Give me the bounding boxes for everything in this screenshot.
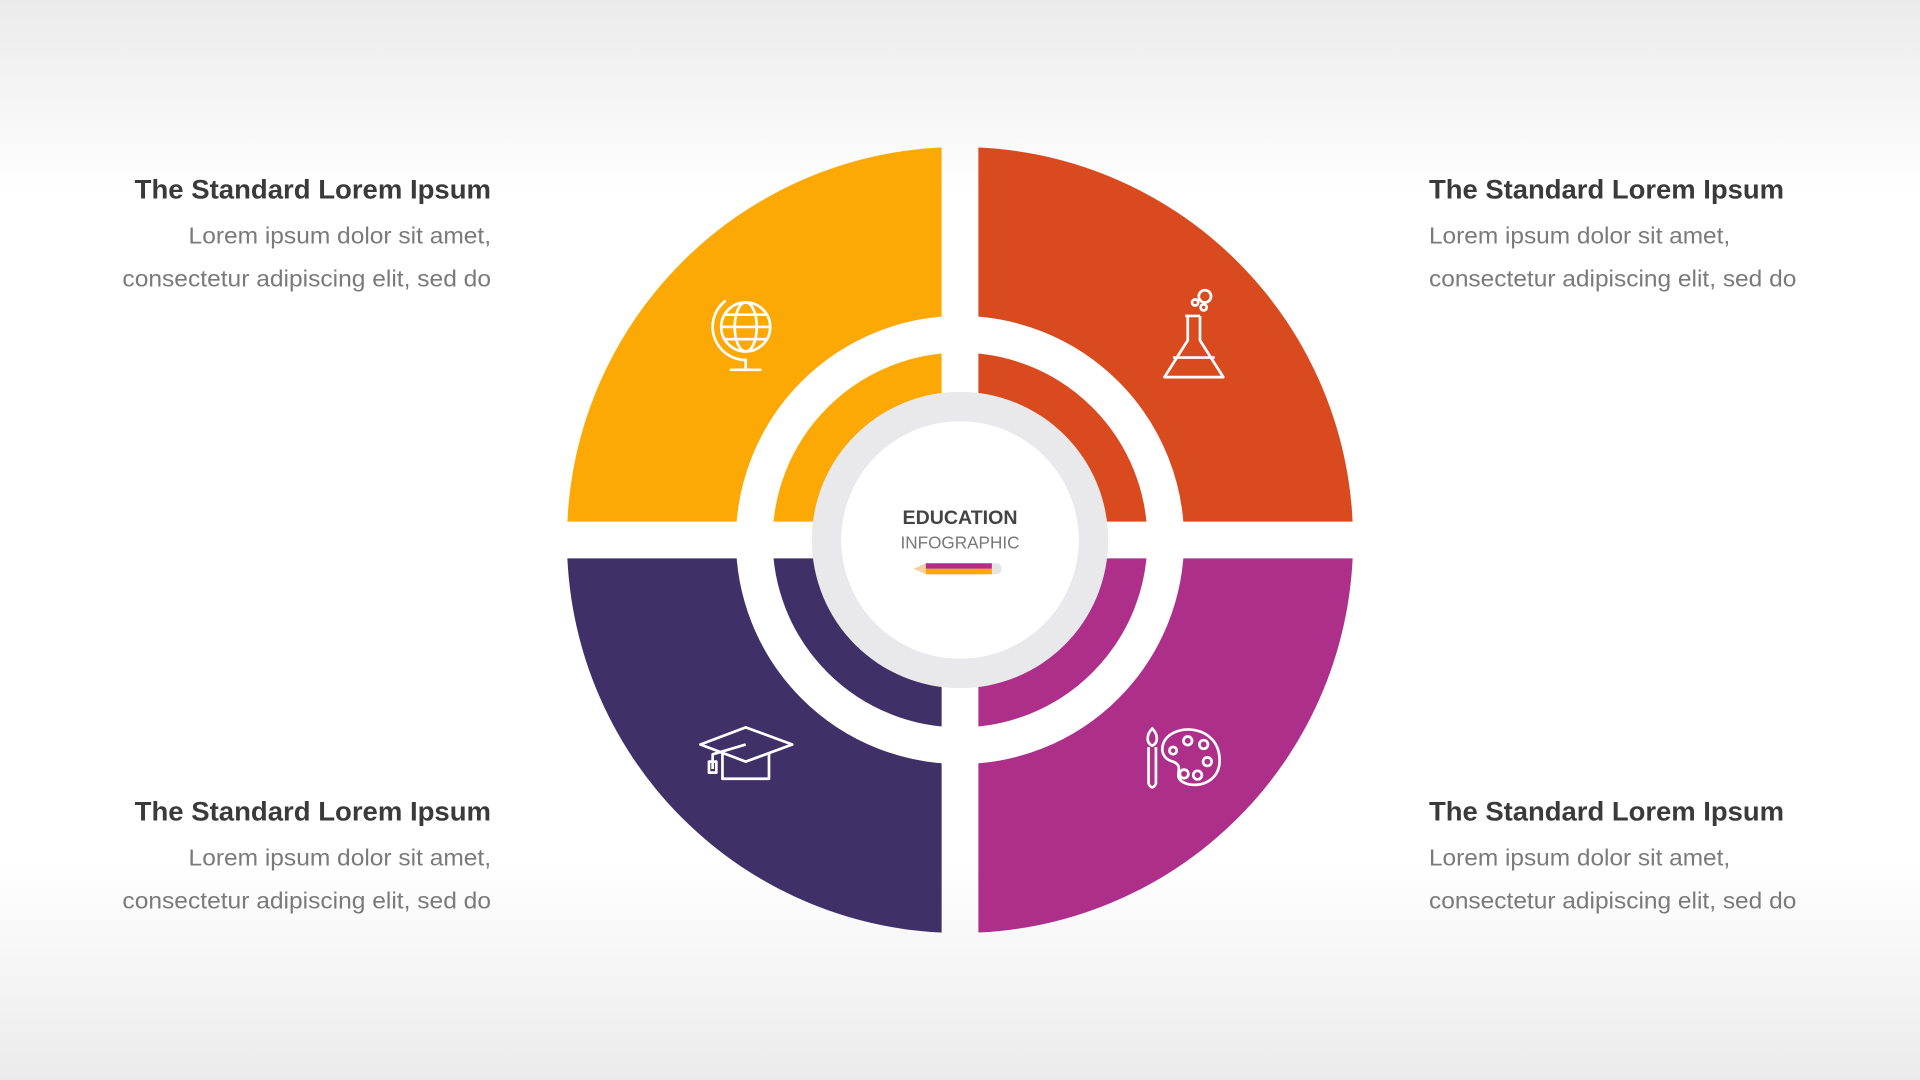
text block: bottom right: The Standard Lorem Ipsum [1429,796,1784,826]
center circle: EDUCATION [903,507,1017,529]
icon: globe [713,301,770,370]
center circle [812,392,1108,688]
text block: top right: consectetur adipiscing elit, sed do [1429,266,1796,292]
text block: top left: Lorem ipsum dolor sit amet, [189,223,491,249]
text block: top left: consectetur adipiscing elit, sed do [122,266,491,292]
icon: palette [1148,729,1220,787]
text block: top left: The Standard Lorem Ipsum [135,174,491,204]
icon: graduation cap [700,727,792,779]
text block: bottom right [1429,796,1796,914]
text block: top right [1429,174,1796,292]
text block: bottom left: Lorem ipsum dolor sit amet, [189,845,491,871]
wheel [567,147,1353,932]
text block: top right: Lorem ipsum dolor sit amet, [1429,223,1730,249]
text block: bottom left: consectetur adipiscing elit, sed do [122,888,491,914]
text block: bottom left: The Standard Lorem Ipsum [135,796,491,826]
text block: bottom right: Lorem ipsum dolor sit amet, [1429,845,1730,871]
text block: top right: The Standard Lorem Ipsum [1429,174,1784,204]
text block: bottom right: consectetur adipiscing elit, sed do [1429,888,1796,914]
text block: top left [122,174,491,292]
icon: flask [1164,290,1223,377]
text block: bottom left [122,796,491,914]
center circle: INFOGRAPHIC [901,533,1019,553]
